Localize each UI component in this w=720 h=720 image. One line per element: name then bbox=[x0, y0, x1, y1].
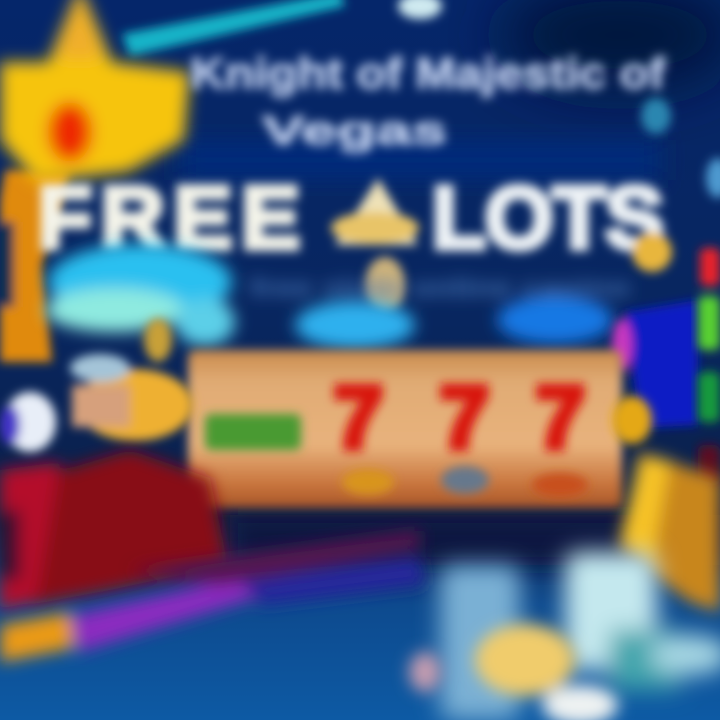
heading: free slots bbox=[38, 168, 672, 313]
heading: free slots: FREE bbox=[38, 168, 300, 267]
golden box right bbox=[620, 452, 720, 612]
cyan clouds: free slots online casino bbox=[250, 275, 630, 302]
title bbox=[190, 49, 665, 153]
red velvet block bbox=[0, 450, 228, 610]
cyan light beam bbox=[122, 0, 720, 198]
red sevens bbox=[334, 368, 585, 467]
red sevens: 7 bbox=[536, 368, 585, 467]
red sevens: 7 bbox=[440, 368, 489, 467]
blue and purple cube bbox=[612, 300, 698, 428]
red sevens: 7 bbox=[334, 368, 383, 467]
title: Knight of Majestic of bbox=[190, 49, 665, 98]
left side coins and gems bbox=[0, 318, 652, 452]
icon: gold star bbox=[0, 0, 190, 182]
neon floor strip bbox=[0, 530, 425, 662]
slot machine panel bbox=[188, 350, 622, 508]
foreground pale blocks bbox=[440, 552, 720, 720]
trophy stem bbox=[0, 170, 70, 362]
panel body bbox=[188, 350, 622, 508]
title: Vegas bbox=[262, 109, 447, 153]
heading: free slots: LOTS bbox=[432, 168, 664, 267]
reel bottom symbols bbox=[342, 466, 588, 497]
traffic light strip bbox=[698, 248, 720, 485]
coin and pearl foreground bbox=[409, 624, 618, 720]
green bar symbol bbox=[205, 414, 301, 450]
cyan clouds bbox=[45, 244, 630, 349]
